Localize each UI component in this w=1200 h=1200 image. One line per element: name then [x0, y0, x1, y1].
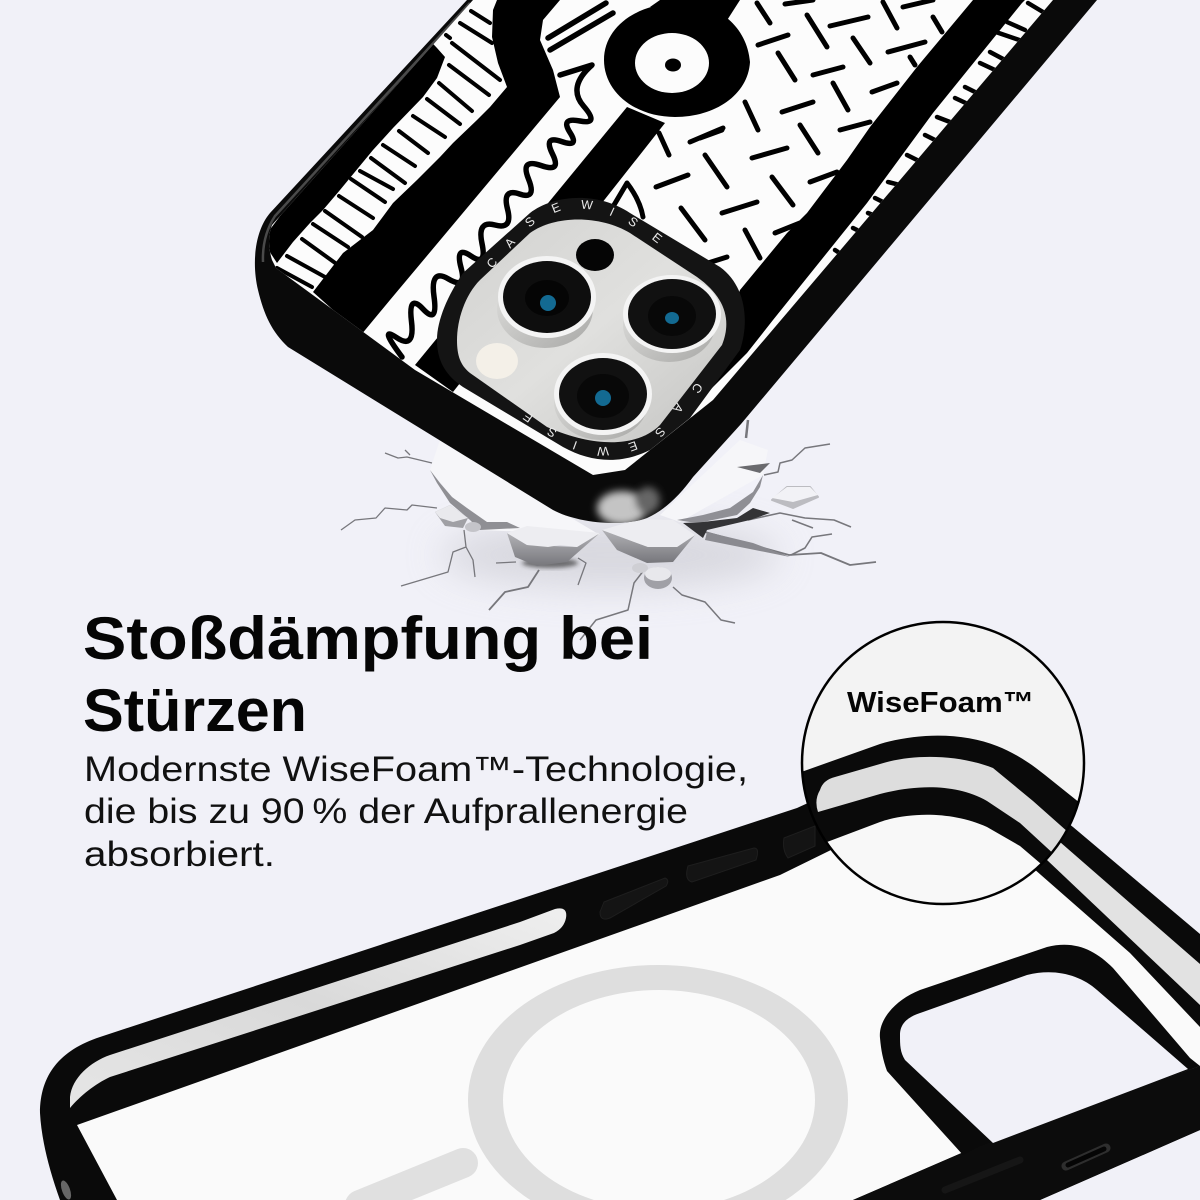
heading: Stürzen	[83, 677, 307, 744]
ring motif	[604, 0, 750, 117]
band right	[700, 0, 1025, 400]
lower slab edge	[705, 532, 790, 557]
wave squiggle	[388, 3, 613, 357]
camera ring lettering: CASEWISE: C	[689, 380, 705, 396]
illustration: cracked ground under impact	[341, 420, 876, 640]
left stripes	[277, 11, 500, 287]
camera ring lettering: CASEWISE: W	[581, 198, 594, 213]
phone bumper	[255, 0, 1097, 523]
charging port and speaker details	[945, 1148, 1106, 1190]
band left	[313, 0, 560, 335]
magnified clear panel	[790, 790, 1095, 910]
clear back panel	[77, 835, 1200, 1200]
body text	[84, 750, 748, 874]
foam strip right	[1047, 842, 1200, 1005]
camera ring lettering: CASEWISE: S	[522, 214, 538, 230]
camera cutout	[880, 945, 1200, 1155]
magnified frame	[804, 736, 1078, 864]
case frame	[40, 770, 1200, 1200]
camera ring lettering: CASEWISE: I	[571, 438, 579, 452]
case pattern	[269, 0, 1053, 475]
lens 1	[497, 256, 596, 348]
crater wall right	[677, 475, 763, 522]
callout: WiseFoam magnifier	[790, 622, 1095, 910]
camera ring lettering: CASEWISE: S	[625, 214, 641, 230]
MagSafe alignment bar	[360, 1163, 463, 1200]
small rocks	[435, 487, 818, 589]
body text: absorbiert.	[84, 835, 275, 874]
camera ring lettering: CASEWISE: A	[669, 401, 686, 416]
camera ring lettering: CASEWISE	[484, 198, 705, 458]
foam strip left	[70, 908, 566, 1108]
camera plate	[457, 220, 726, 442]
bottom edge band	[853, 1066, 1200, 1200]
illustration: clear case, inner view	[40, 770, 1200, 1200]
bumper highlight at tip	[597, 487, 660, 525]
rock chunk left	[507, 526, 600, 568]
camera ring lettering: CASEWISE: I	[607, 205, 617, 219]
bumper edge reflections	[263, 3, 470, 262]
corner hole	[59, 1179, 73, 1200]
illustration: phone with patterned case, back view	[250, 0, 1100, 525]
MagSafe ring	[468, 965, 848, 1200]
debris triangle	[737, 463, 770, 473]
lens 2	[623, 275, 721, 362]
diamond plate dashes	[614, 0, 942, 263]
camera hole	[576, 239, 614, 271]
camera ring lettering: CASEWISE: E	[649, 230, 665, 246]
heading	[83, 605, 653, 744]
flash	[476, 343, 518, 379]
right edge dashes	[835, 3, 1043, 252]
lens 3	[554, 353, 652, 440]
callout label: WiseFoam™	[847, 687, 1034, 719]
camera ring lettering: CASEWISE: E	[550, 200, 562, 216]
camera surround	[437, 198, 745, 460]
heading: Stoßdämpfung bei	[83, 605, 653, 672]
camera ring lettering: CASEWISE: E	[627, 438, 639, 454]
camera ring lettering: CASEWISE: A	[502, 235, 518, 251]
camera ring lettering: CASEWISE: S	[545, 424, 559, 440]
dark crevice	[683, 508, 770, 538]
side buttons	[600, 826, 815, 919]
camera ring lettering: CASEWISE: S	[652, 424, 668, 440]
band centre	[415, 107, 665, 392]
crater wall left	[430, 470, 520, 530]
body text: Modernste WiseFoam™-Technologie,	[84, 750, 748, 789]
camera ring lettering: CASEWISE: W	[597, 444, 609, 458]
rock chunk centre	[602, 519, 695, 563]
camera ring lettering: CASEWISE: E	[521, 409, 535, 425]
camera ring lettering: CASEWISE: C	[484, 255, 500, 271]
raised plates	[430, 440, 768, 535]
black panel along bumper	[262, 30, 445, 263]
body text: die bis zu 90 % der Aufprallenergie	[84, 792, 688, 831]
magnified foam strip	[816, 756, 1066, 852]
